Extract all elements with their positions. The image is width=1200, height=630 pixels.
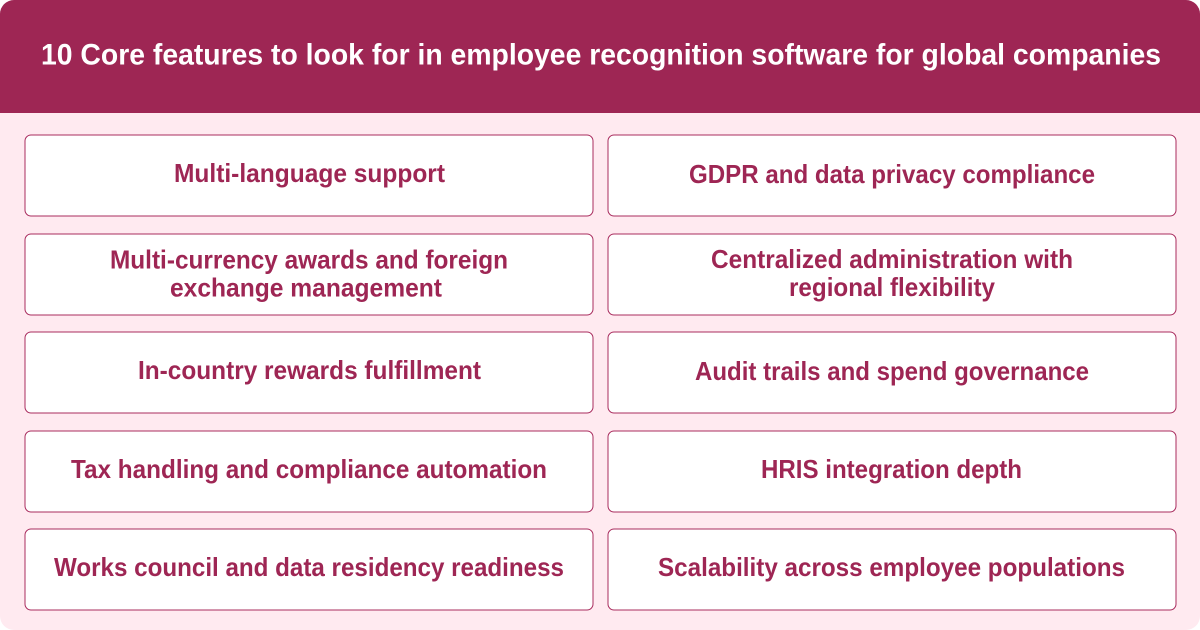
panel: In-country rewards fulfillment: In-country rewards fulfillment bbox=[138, 355, 481, 385]
panel: GDPR and data privacy compliance: GDPR and data privacy compliance bbox=[689, 159, 1095, 189]
panel: Works council and data residency readiness: Works council and data residency readiness bbox=[54, 552, 564, 582]
panel: GDPR and data privacy compliance bbox=[608, 135, 1176, 216]
panel: Centralized administration bbox=[608, 234, 1176, 315]
panel: Multi-language support bbox=[25, 135, 593, 216]
panel: HRIS integration depth: HRIS integration depth bbox=[761, 454, 1022, 484]
panel: Audit trails and spend governance bbox=[608, 332, 1176, 413]
panel: Scalability across employee populations: Scalability across employee populations bbox=[658, 552, 1125, 582]
header banner bbox=[0, 0, 1200, 113]
title: 10 Core features to look for in employee recognition software for global companies bbox=[41, 38, 1161, 72]
panel: Multi-language support: Multi-language support bbox=[174, 158, 445, 188]
panel: Scalability across employee populations bbox=[608, 529, 1176, 610]
panel: Centralized administration: regional flexibility bbox=[789, 272, 995, 302]
panel: Tax handling and compliance automation bbox=[25, 431, 593, 512]
panel: Tax handling and compliance automation: Tax handling and compliance automation bbox=[71, 454, 547, 484]
panel: Multi-currency awards bbox=[25, 234, 593, 315]
panel: Multi-currency awards: Multi-currency awards and foreign bbox=[110, 244, 508, 274]
panel: Multi-currency awards: exchange management bbox=[170, 272, 442, 302]
panel: HRIS integration depth bbox=[608, 431, 1176, 512]
panel: Works council and data residency readiness bbox=[25, 529, 593, 610]
panel: Centralized administration: Centralized administration with bbox=[711, 244, 1073, 274]
panel: Audit trails and spend governance: Audit trails and spend governance bbox=[695, 356, 1089, 386]
panel: In-country rewards fulfillment bbox=[25, 332, 593, 413]
